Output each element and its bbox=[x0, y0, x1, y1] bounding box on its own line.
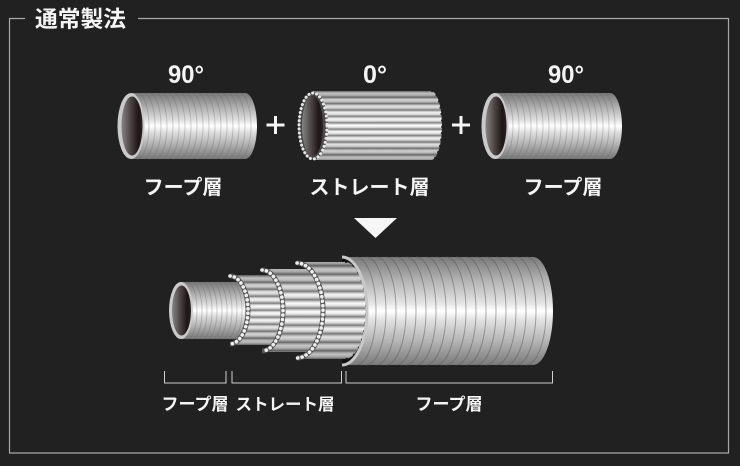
assembled straight layer 1 bbox=[230, 275, 290, 345]
label: 0 degrees: 0° bbox=[363, 61, 387, 89]
tube: top left hoop layer bbox=[118, 93, 257, 159]
label: bottom hoop layer left: フープ層 bbox=[162, 395, 228, 414]
label: straight layer: ストレート層 bbox=[310, 177, 430, 199]
label: 90 degrees right: 90° bbox=[548, 61, 584, 89]
title: 通常製法 bbox=[35, 7, 126, 32]
label: hoop layer right: フープ層 bbox=[524, 176, 602, 199]
arrow: down triangle bbox=[354, 218, 397, 238]
tube: top right hoop layer bbox=[482, 93, 622, 159]
bracket: hoop layer bbox=[164, 371, 226, 383]
bracket: straight layer bbox=[232, 371, 342, 383]
label: bottom straight layer: ストレート層 bbox=[236, 396, 334, 414]
label: bottom hoop layer right: フープ層 bbox=[416, 395, 482, 414]
bracket: outer hoop layer bbox=[346, 371, 552, 383]
assembled straight layer 2 bbox=[262, 269, 330, 352]
label: hoop layer left: フープ層 bbox=[144, 176, 222, 199]
plus sign left bbox=[266, 116, 284, 134]
tube: assembled layers bbox=[169, 257, 553, 365]
assembled straight layer 3 bbox=[297, 258, 367, 364]
tube: top centre straight layer bbox=[298, 91, 442, 160]
plus sign right bbox=[452, 116, 470, 134]
assembled outer hoop layer bbox=[342, 257, 553, 365]
label: 90 degrees left: 90° bbox=[168, 61, 204, 89]
assembled inner hoop layer bbox=[169, 282, 255, 339]
